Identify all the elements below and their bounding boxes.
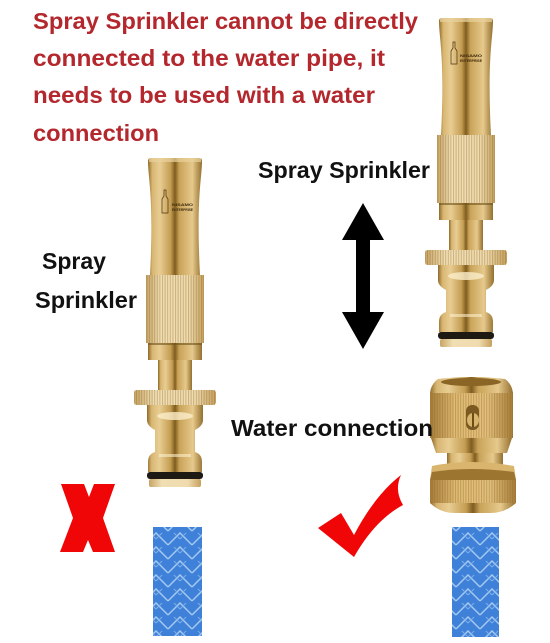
icon: right brass spray sprinkler: ENTERPRISE xyxy=(460,58,482,63)
icon: left brass spray sprinkler: ENTERPRISE xyxy=(172,207,193,212)
heading: warning text: connection xyxy=(33,120,159,146)
icon: brass water connection xyxy=(430,377,516,513)
label: left spray sprinkler: Sprinkler xyxy=(35,287,137,313)
label: left spray sprinkler xyxy=(35,248,137,313)
icon: left brass spray sprinkler xyxy=(134,158,216,487)
icon: connector screw xyxy=(466,405,479,430)
icon: left brass spray sprinkler: NISAMO xyxy=(172,202,193,207)
heading: warning text: needs to be used with a water xyxy=(33,82,375,108)
arrow: black double-headed vertical xyxy=(342,203,384,349)
heading: warning text xyxy=(33,8,418,146)
label: water connection: Water connection xyxy=(231,415,433,441)
icon: left blue hose xyxy=(153,527,202,636)
icon: right brass spray sprinkler xyxy=(425,18,507,347)
icon: red cross xyxy=(60,484,115,552)
heading: warning text: connected to the water pipe, it xyxy=(33,45,385,71)
icon: right blue hose xyxy=(452,527,499,637)
label: left spray sprinkler: Spray xyxy=(42,248,106,274)
icon: right brass spray sprinkler: NISAMO xyxy=(460,53,482,58)
heading: warning text: Spray Sprinkler cannot be directly xyxy=(33,8,418,34)
label: right spray sprinkler: Spray Sprinkler xyxy=(258,157,430,183)
icon: red check mark xyxy=(318,475,403,557)
